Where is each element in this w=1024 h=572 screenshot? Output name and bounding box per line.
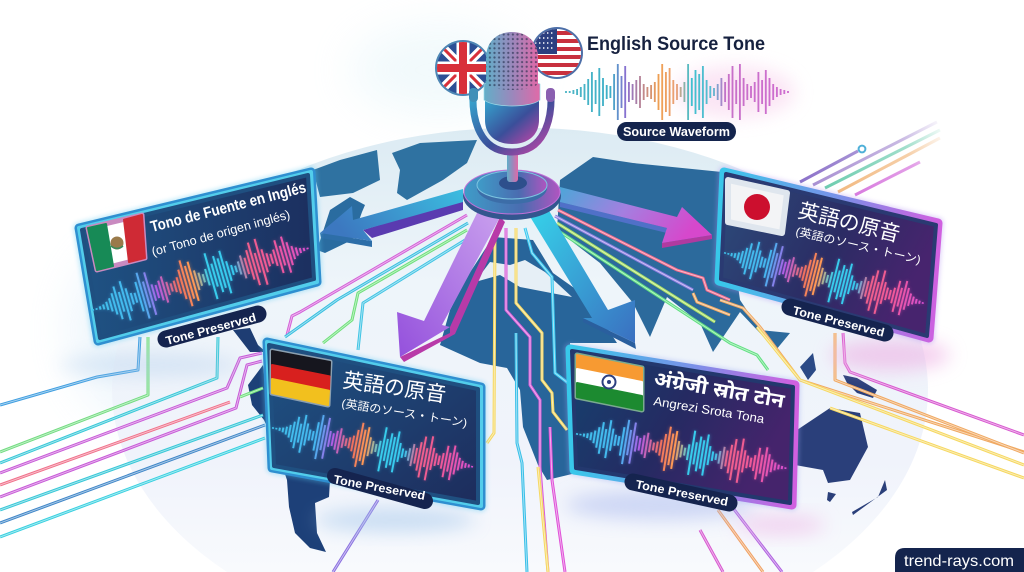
continent: Africa and Europe	[440, 237, 617, 480]
continent: Canadian islands	[313, 150, 380, 197]
continent: southeast Asia islands	[800, 353, 816, 380]
label: Source Waveform	[617, 122, 736, 141]
continent: New Guinea	[843, 375, 877, 398]
globe	[112, 128, 928, 572]
panel: Hindi	[570, 349, 795, 509]
card body	[267, 342, 481, 506]
card body	[79, 172, 317, 341]
continent: North America	[317, 197, 365, 253]
mic yoke	[469, 88, 555, 152]
label: Source Waveform: Source Waveform	[623, 125, 730, 139]
source waveform	[566, 64, 788, 120]
mic collar	[484, 82, 540, 106]
heading: 英語の原音	[341, 369, 448, 407]
icon: Japanese flag	[728, 180, 787, 233]
badge: Tone Preserved: Tone Preserved	[332, 472, 426, 503]
flag: United States	[531, 27, 583, 79]
badge: trend-rays.com	[895, 548, 1024, 572]
waveform	[720, 231, 928, 325]
badge: Tone Preserved: Tone Preserved	[634, 477, 729, 509]
world map continents	[233, 140, 887, 552]
card body	[570, 349, 795, 505]
continent: Central America	[233, 328, 266, 352]
waveform	[573, 412, 789, 490]
icon: Indian flag	[577, 355, 642, 410]
continent: Asia	[557, 157, 790, 352]
flag: United Kingdom	[435, 40, 491, 96]
continent: New Zealand	[852, 480, 887, 515]
badge: Tone Preserved: Tone Preserved	[164, 310, 258, 348]
title: English Source Tone: English Source Tone	[587, 34, 765, 55]
icon: Mexican flag	[88, 215, 145, 270]
waveform	[269, 406, 476, 489]
badge: Tone Preserved: Tone Preserved	[791, 303, 886, 340]
subheading: (英語のソース・トーン)	[341, 396, 468, 430]
sea: Mediterranean	[475, 260, 572, 297]
card body	[719, 172, 938, 338]
panel: Japanese	[719, 172, 938, 340]
heading: 英語の原音	[796, 200, 902, 247]
arrow: to Spanish card	[320, 189, 463, 247]
mic grille	[486, 32, 538, 90]
mic stem	[507, 150, 518, 182]
panel: German	[267, 342, 481, 506]
mic cup	[485, 98, 539, 144]
continent: South America	[248, 365, 330, 552]
microphone	[463, 32, 561, 220]
subheading: (or Tono de origen inglés)	[150, 207, 292, 259]
network lines	[0, 122, 1024, 572]
shadow pools under cards	[60, 339, 950, 535]
heading: अंग्रेजी स्रोत टोन	[652, 366, 787, 413]
mic base	[463, 170, 561, 220]
panel: Spanish	[79, 172, 317, 348]
subheading: (英語のソース・トーン)	[794, 224, 922, 267]
waveform	[86, 226, 314, 333]
icon: German flag	[272, 351, 330, 405]
continent: Greenland	[392, 140, 477, 200]
arrow: to German card	[397, 211, 505, 362]
continent: Australia	[795, 408, 868, 483]
continent: Tasmania	[827, 492, 836, 502]
arrow: to Japanese card	[560, 187, 712, 248]
heading: Tono de Fuente en Inglés	[149, 179, 308, 236]
badge: trend-rays.com: trend-rays.com	[904, 553, 1014, 570]
arrow: to Hindi card	[529, 209, 636, 349]
subheading: Angrezi Srota Tona	[653, 394, 765, 426]
